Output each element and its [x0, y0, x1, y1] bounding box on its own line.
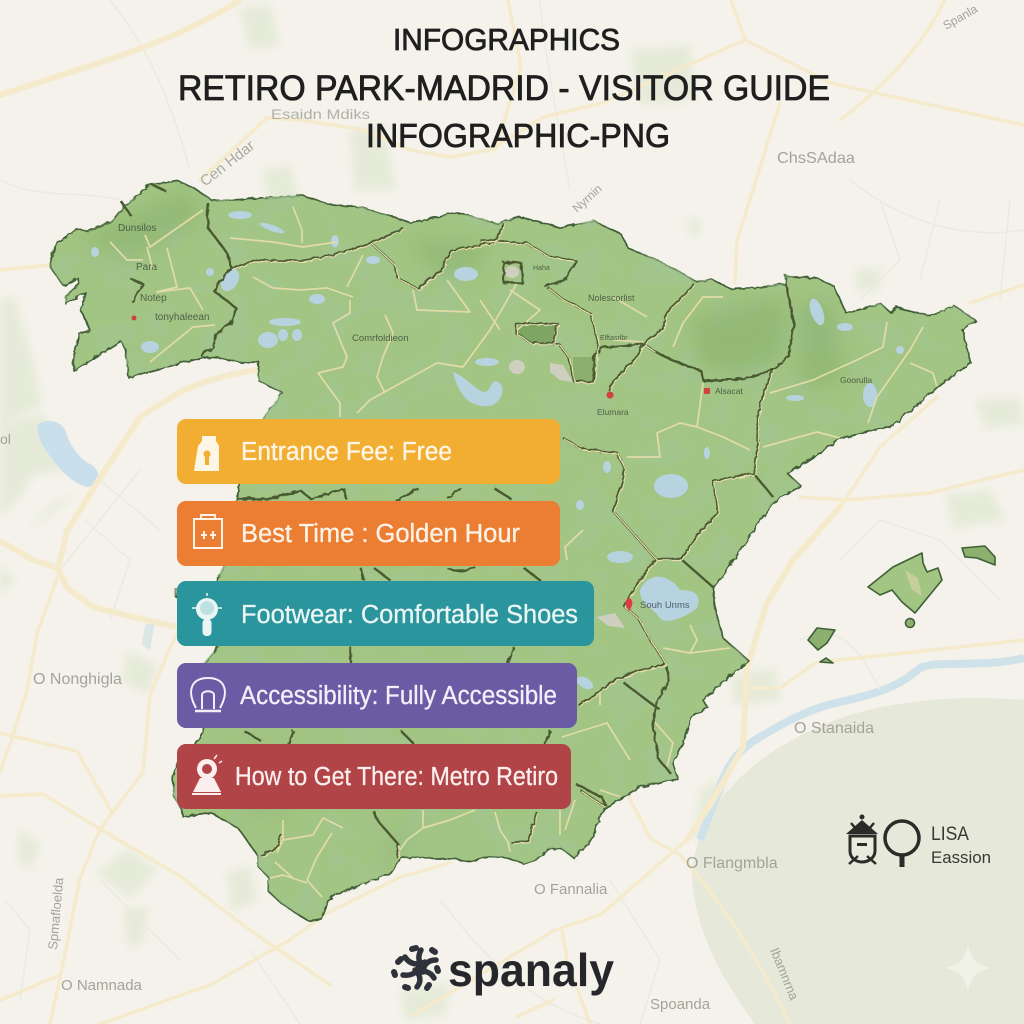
- sparkle: [944, 944, 992, 992]
- map labels: Esaidn Mdiks: [271, 106, 370, 122]
- icon: magnifier: [885, 821, 919, 867]
- icon: magnifier pin: [192, 593, 222, 636]
- icon: emblem: [846, 814, 878, 864]
- panel: entrance fee: Entrance Fee: Free: [241, 438, 452, 466]
- region borders: tan core: [231, 224, 774, 858]
- map labels: Notep: [140, 293, 167, 304]
- icon: dome: [191, 678, 225, 711]
- map labels: Alsacat: [715, 386, 744, 396]
- title: [178, 22, 830, 154]
- map: Spain regions: [50, 180, 978, 922]
- map labels: O Namnada: [61, 977, 143, 994]
- logo: spanaly: spanaly: [448, 944, 614, 996]
- map labels: Spoanda: [650, 996, 711, 1013]
- panel: entrance fee: [177, 419, 560, 484]
- icon: calendar: [194, 515, 222, 548]
- map labels: O Nonghigla: [33, 671, 122, 688]
- lake: [37, 421, 98, 487]
- map labels: O Fannalia: [534, 881, 608, 898]
- icon: ticket lock: [194, 436, 219, 471]
- darker forest tint: [88, 196, 841, 812]
- map labels: Elumara: [597, 407, 629, 417]
- panel: how to get there: How to Get There: Metro Retiro: [235, 763, 558, 791]
- land mass: [50, 180, 975, 920]
- map labels: Goorulla: [840, 375, 872, 385]
- map labels: tonyhaleean: [155, 312, 210, 323]
- panel: best time: [177, 501, 560, 566]
- map labels: Comrfoldieon: [352, 333, 408, 344]
- map labels: Para: [136, 262, 158, 273]
- panel: footwear: Footwear: Comfortable Shoes: [241, 601, 578, 629]
- title: INFOGRAPHICS: [393, 22, 620, 57]
- map labels: ol: [0, 431, 11, 447]
- title: RETIRO PARK-MADRID - VISITOR GUIDE: [178, 69, 830, 108]
- islands: [808, 546, 995, 663]
- urban patches: [505, 266, 625, 628]
- tan routes: [110, 207, 937, 897]
- panel: footwear: [177, 581, 594, 646]
- map labels: Nyrnin: [570, 182, 605, 215]
- map labels: Cen Hdar: [197, 137, 258, 190]
- map markers: [132, 316, 710, 611]
- map labels: Elftasrlbr: [600, 335, 628, 342]
- map labels: Dunsilos: [118, 223, 156, 234]
- icon: camera: [192, 755, 222, 795]
- legend: LISA Eassion: LISA: [931, 824, 969, 845]
- map labels: Souh Unms: [640, 600, 690, 611]
- pale green region: [692, 698, 1024, 1024]
- icon: logo mark: [394, 948, 438, 988]
- river: [700, 658, 1024, 840]
- legend: LISA Eassion: [846, 814, 991, 867]
- map labels: Ibamnrna: [767, 946, 802, 1003]
- map labels: Spanla: [940, 2, 980, 33]
- map labels: Nolescorlist: [588, 293, 635, 303]
- title: INFOGRAPHIC-PNG: [366, 117, 670, 154]
- map labels: ChsSAdaa: [777, 150, 855, 167]
- panel: accessibility: Accessibility: Fully Accessible: [240, 682, 557, 710]
- dark inset region: [515, 323, 557, 342]
- legend: LISA Eassion: Eassion: [931, 848, 991, 867]
- map labels: O Stanaida: [794, 720, 874, 737]
- panel: how to get there: [177, 744, 571, 809]
- panel: accessibility: [177, 663, 577, 728]
- map labels: O Flangmbla: [686, 855, 778, 872]
- map labels: Haha: [533, 265, 550, 272]
- panel: best time: Best Time : Golden Hour: [241, 520, 520, 548]
- lakes: [91, 211, 904, 692]
- region borders: dark: [120, 183, 793, 857]
- map labels: Spmafloelda: [45, 876, 66, 950]
